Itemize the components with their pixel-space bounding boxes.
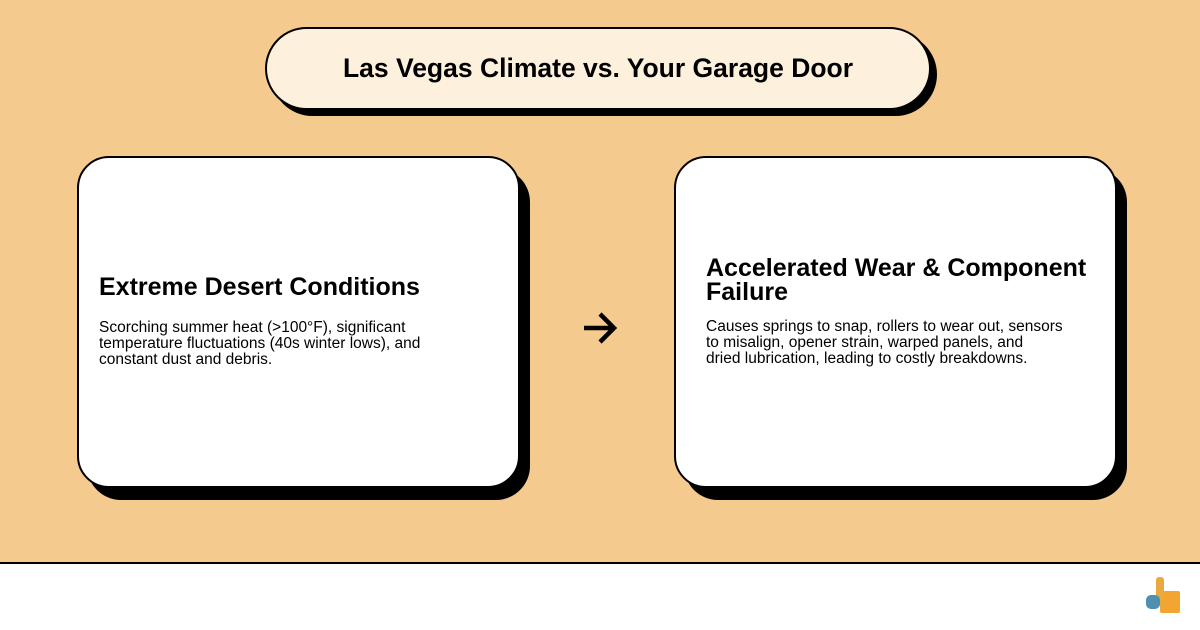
text: conditions: temperature fluctuations (40s winter lows), and <box>99 335 420 352</box>
arrow <box>584 312 618 344</box>
text: wear: to misalign, opener strain, warped panels, and <box>706 334 1023 351</box>
panel: accelerated wear <box>674 156 1127 500</box>
text: conditions: Scorching summer heat (>100°F), significant <box>99 319 405 336</box>
title: Las Vegas Climate vs. Your Garage Door <box>343 53 853 83</box>
text: conditions: constant dust and debris. <box>99 351 272 368</box>
heading: conditions: Extreme Desert Conditions <box>99 273 420 301</box>
text: conditions <box>99 319 420 368</box>
text: wear: dried lubrication, leading to costly breakdowns. <box>706 350 1027 367</box>
text: wear <box>706 318 1063 367</box>
text: wear: Causes springs to snap, rollers to wear out, sensors <box>706 318 1063 335</box>
heading: wear: Accelerated Wear & Component Failure <box>706 254 1086 306</box>
panel: extreme desert conditions <box>77 156 530 500</box>
icon: logo <box>1146 577 1180 613</box>
title <box>265 27 937 116</box>
